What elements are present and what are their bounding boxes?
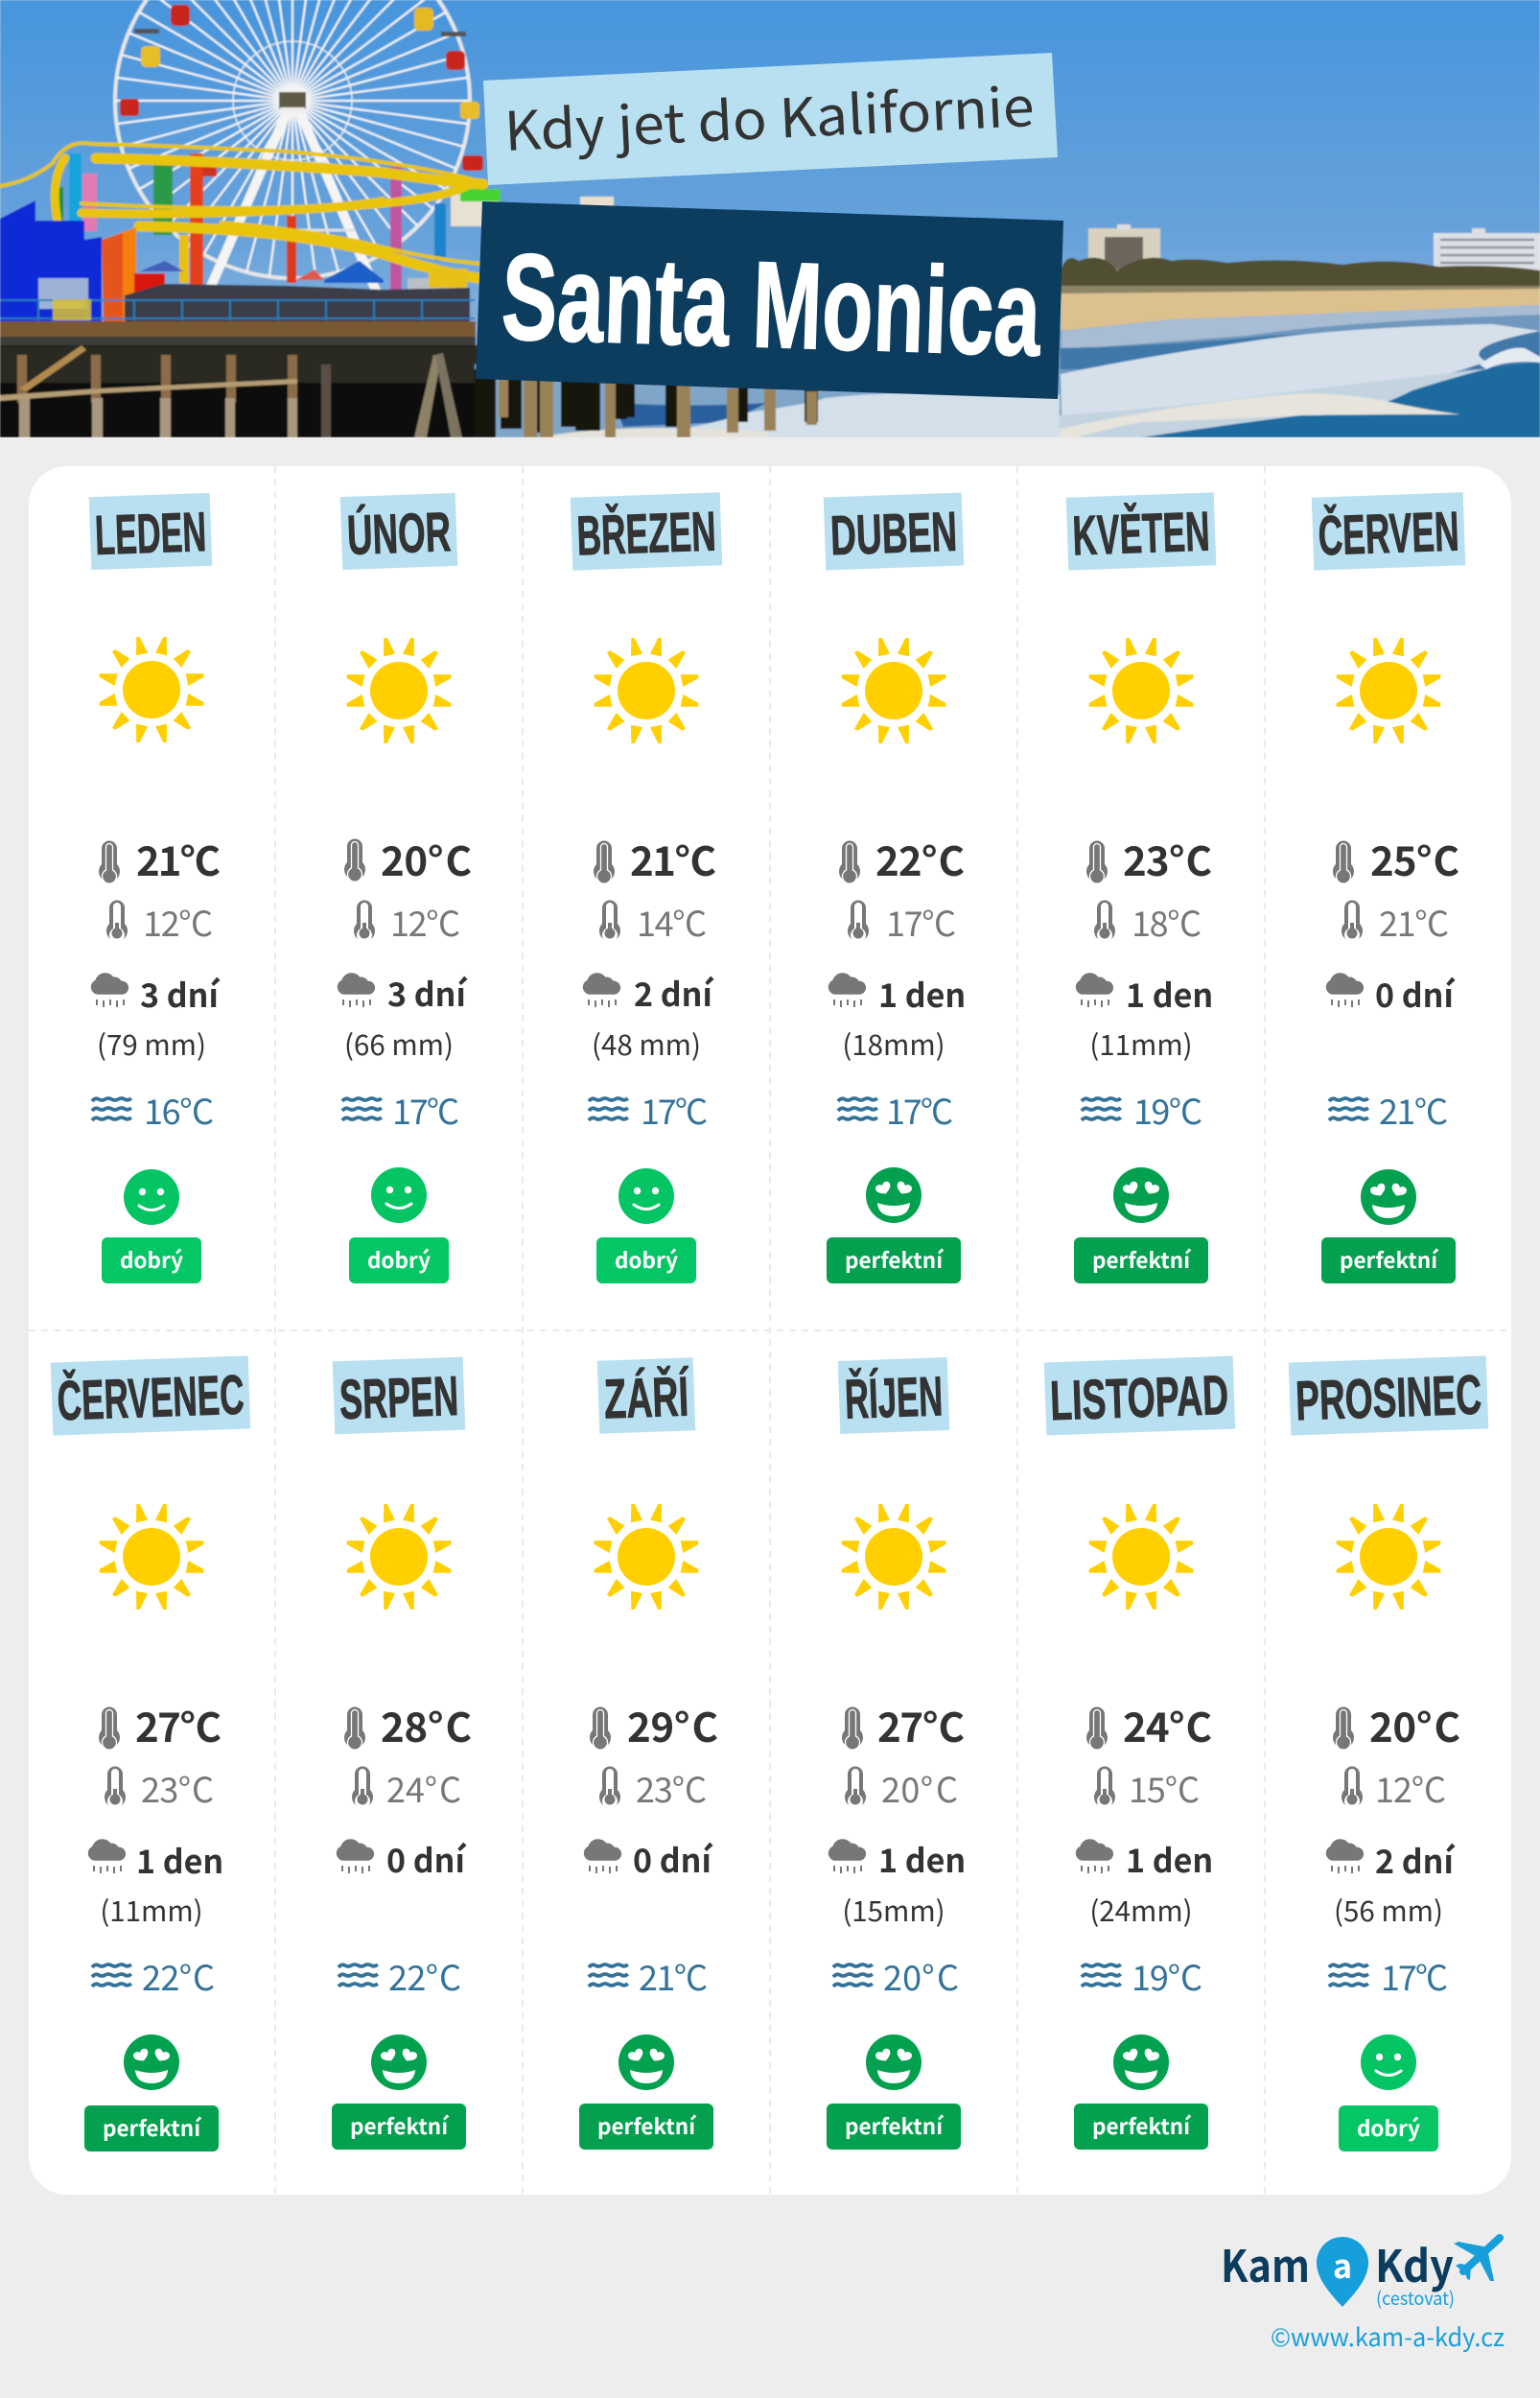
high temperature: 28° C <box>381 1696 472 1754</box>
high temperature: 27° C <box>135 1696 222 1754</box>
high temperature: 27° C <box>877 1696 965 1754</box>
sea temperature <box>1329 1951 1448 2001</box>
rainfall: (11mm) <box>1089 1023 1193 1064</box>
month: Prosinec <box>1289 1355 1488 2151</box>
low temperature <box>599 897 707 947</box>
title ribbon: Santa Monica: Santa Monica <box>500 228 1043 383</box>
icon: sun <box>595 638 698 743</box>
rainy days: 1 den <box>878 970 966 1017</box>
rating: good <box>102 1169 201 1283</box>
rating: good <box>349 1167 449 1283</box>
panel: climate table <box>29 466 1511 2195</box>
rating: good: dobrý <box>367 1244 431 1275</box>
pier pilings <box>475 369 818 437</box>
logo: Kam a Kdy <box>1221 2232 1500 2311</box>
sea temperature <box>838 1085 953 1135</box>
low temperature: 23° C <box>141 1763 214 1813</box>
logo: Kam a Kdy: Kdy <box>1375 2232 1454 2295</box>
rating: perfect: perfektní <box>1340 1244 1438 1275</box>
high temperature: 21° C <box>136 830 221 888</box>
low temperature: 14° C <box>637 897 707 947</box>
rating: perfect: perfektní <box>845 2110 944 2141</box>
sea behind pilings <box>475 364 1074 437</box>
low temperature <box>352 1763 461 1813</box>
month: Listopad <box>1044 1356 1235 2150</box>
rainfall: (48 mm) <box>592 1023 701 1064</box>
sea temperature <box>1082 1085 1202 1135</box>
rainy days <box>1077 1835 1213 1882</box>
high temperature <box>99 830 221 888</box>
rainy days: 3 dní <box>387 969 468 1016</box>
sea temperature <box>1329 1085 1448 1135</box>
heading: Březen: BŘEZEN <box>575 500 717 568</box>
sea temperature: 16° C <box>144 1085 214 1135</box>
rating: good: dobrý <box>120 1244 183 1275</box>
low temperature <box>599 1763 707 1813</box>
rating: perfect <box>827 1167 961 1283</box>
heading: Duben <box>824 493 964 570</box>
crowd <box>125 284 470 322</box>
heading: Únor: ÚNOR <box>346 501 452 567</box>
subtitle ribbon: Kdy jet do Kalifornie <box>483 53 1058 185</box>
low temperature <box>105 1763 214 1813</box>
heading: Září: ZÁŘÍ <box>603 1365 690 1431</box>
rating: good: dobrý <box>615 1244 678 1275</box>
rainfall: (79 mm) <box>97 1023 206 1064</box>
icon: sun <box>100 637 203 742</box>
low temperature: 12° C <box>143 897 213 947</box>
beach towers <box>1087 223 1540 271</box>
low temperature: 12° C <box>1375 1763 1446 1813</box>
rainfall: (18mm) <box>842 1023 945 1064</box>
rainy days: 1 den <box>136 1836 223 1883</box>
header photo: Santa Monica pier and beach <box>0 0 1540 437</box>
sea temperature <box>338 1951 461 2001</box>
sea temperature: 19° C <box>1132 1951 1202 2001</box>
rainy days <box>1327 1836 1456 1883</box>
sea temperature <box>92 1085 214 1135</box>
low temperature: 18° C <box>1132 897 1202 947</box>
heading: Leden <box>89 493 212 570</box>
high temperature: 25° C <box>1370 830 1459 888</box>
icon: map pin <box>1317 2237 1368 2307</box>
pier substructure <box>0 345 479 437</box>
palms <box>1061 257 1540 287</box>
sea temperature: 21° C <box>1379 1085 1448 1135</box>
icon: sun <box>595 1504 698 1610</box>
low temperature <box>106 897 213 947</box>
month: Červenec <box>51 1355 250 2151</box>
rainy days: 0 dní <box>633 1835 713 1882</box>
heading: Květen <box>1066 492 1216 571</box>
rainy days <box>338 969 468 1016</box>
month: Srpen <box>332 1357 472 2150</box>
heading: Květen: KVĚTEN <box>1071 501 1211 567</box>
roller coaster tracks <box>0 143 484 278</box>
low temperature: 12° C <box>390 897 460 947</box>
rainy days <box>1077 970 1213 1017</box>
rating: perfect <box>332 2034 466 2150</box>
rating: perfect <box>1074 2034 1208 2150</box>
heading: Únor <box>340 493 457 570</box>
rainy days: 1 den <box>1126 970 1213 1017</box>
low temperature <box>1342 897 1449 947</box>
pier deck <box>0 321 476 337</box>
icon: sun <box>1337 638 1440 743</box>
sea temperature <box>92 1951 215 2001</box>
heading: Červen <box>1312 492 1465 571</box>
icon: sun <box>842 638 945 743</box>
heading: Srpen <box>333 1357 465 1434</box>
month: Říjen <box>827 1357 966 2150</box>
rating: perfect: perfektní <box>1092 1244 1191 1275</box>
sea temperature: 20° C <box>883 1951 959 2001</box>
rainy days: 2 dní <box>1375 1836 1456 1883</box>
heading: Březen <box>571 492 722 571</box>
low temperature <box>1094 897 1202 947</box>
rating: perfect: perfektní <box>845 1244 944 1275</box>
rating: good: dobrý <box>1357 2112 1420 2143</box>
sea temperature <box>833 1951 959 2001</box>
rainy days: 2 dní <box>634 969 714 1016</box>
heading: Říjen: ŘÍJEN <box>844 1365 944 1431</box>
rating: good <box>596 1168 696 1283</box>
rainfall: (66 mm) <box>344 1023 454 1064</box>
low temperature: 23° C <box>636 1763 707 1813</box>
water <box>1059 315 1540 416</box>
high temperature: 22° C <box>875 830 965 888</box>
rating: perfect: perfektní <box>103 2112 201 2143</box>
rainy days <box>89 1836 223 1883</box>
heading: Červenec <box>51 1355 250 1436</box>
pillars <box>69 153 82 225</box>
low temperature: 20° C <box>881 1763 958 1813</box>
heading: Listopad: LISTOPAD <box>1049 1364 1229 1432</box>
low temperature: 24° C <box>386 1763 461 1813</box>
logo: Kam a Kdy: Kam <box>1221 2232 1310 2295</box>
rating: perfect <box>827 2034 961 2150</box>
rainy days: 3 dní <box>140 970 221 1017</box>
month: Červen <box>1312 492 1465 1283</box>
high temperature: 29° C <box>627 1696 718 1754</box>
rainy days <box>1327 970 1456 1017</box>
heading: Červenec: ČERVENEC <box>57 1364 245 1432</box>
rainy days <box>829 1835 966 1882</box>
icon: airplane <box>1454 2238 1500 2281</box>
rainy days <box>585 1835 713 1882</box>
rating: perfect: perfektní <box>1092 2110 1191 2141</box>
heading: Srpen: SRPEN <box>338 1365 459 1431</box>
month: Květen <box>1066 492 1216 1283</box>
low temperature <box>354 897 460 947</box>
rainfall: (15mm) <box>842 1890 945 1930</box>
rainy days <box>584 969 714 1016</box>
sea temperature <box>589 1085 708 1135</box>
month: Únor <box>338 493 472 1283</box>
rating: perfect <box>1321 1169 1456 1283</box>
website link: ©www.kam-a-kdy.cz <box>1271 2318 1505 2354</box>
subtitle ribbon: Kdy jet do Kalifornie: Kdy jet do Kalifornie <box>502 64 1036 167</box>
rainy days <box>829 970 966 1017</box>
month: Duben <box>824 493 966 1283</box>
logo: Kam a Kdy: (cestovat) <box>1376 2285 1455 2311</box>
low temperature: 17° C <box>886 897 956 947</box>
high temperature: 21° C <box>630 830 716 888</box>
month: Září <box>579 1357 718 2150</box>
low temperature: 15° C <box>1129 1763 1200 1813</box>
high temperature: 23° C <box>1123 830 1212 888</box>
rainfall: (56 mm) <box>1334 1890 1443 1930</box>
heading: Říjen <box>838 1357 949 1434</box>
sea temperature: 17° C <box>392 1085 459 1135</box>
sand <box>1060 289 1540 331</box>
high temperature: 20° C <box>381 830 472 888</box>
low temperature <box>848 897 956 947</box>
rainy days: 1 den <box>1126 1835 1213 1882</box>
sea temperature: 19° C <box>1133 1085 1202 1135</box>
heading: Listopad <box>1044 1356 1235 1435</box>
high temperature: 24° C <box>1123 1696 1212 1754</box>
sea temperature: 17° C <box>641 1085 708 1135</box>
title ribbon: Santa Monica <box>476 201 1063 399</box>
rainy days <box>92 970 221 1017</box>
icon: sun <box>347 638 451 743</box>
sea temperature: 21° C <box>639 1951 708 2001</box>
umbrellas and stalls <box>139 261 184 271</box>
rainfall: (11mm) <box>100 1890 203 1930</box>
icon: sun <box>1089 1504 1193 1610</box>
sea temperature: 17° C <box>886 1085 953 1135</box>
sea temperature: 17° C <box>1381 1951 1448 2001</box>
sea temperature: 22° C <box>142 1951 215 2001</box>
icon: sun <box>100 1504 203 1610</box>
low temperature <box>1342 1763 1446 1813</box>
rainy days: 1 den <box>878 1835 966 1882</box>
icon: sun <box>1089 638 1193 743</box>
blue building <box>0 200 136 326</box>
rainy days: 0 dní <box>386 1835 467 1882</box>
icon: map pin: a <box>1333 2241 1352 2288</box>
ferris wheel <box>115 0 483 297</box>
icon: sun <box>1337 1504 1440 1610</box>
sea temperature <box>342 1085 459 1135</box>
low temperature <box>1094 1763 1200 1813</box>
rating: perfect <box>1074 1167 1208 1283</box>
icon: sun <box>842 1504 945 1610</box>
heading: Duben: DUBEN <box>829 501 958 567</box>
icon: sun <box>347 1504 451 1610</box>
heading: Září <box>597 1357 695 1434</box>
rainy days <box>338 1835 467 1882</box>
rating: perfect <box>579 2034 713 2150</box>
sea temperature <box>1082 1951 1202 2001</box>
rating: perfect: perfektní <box>350 2110 449 2141</box>
month: Březen <box>571 492 722 1283</box>
sea temperature: 22° C <box>388 1951 461 2001</box>
rating: perfect <box>84 2034 219 2151</box>
month: Leden <box>89 493 221 1283</box>
sea temperature <box>589 1951 708 2001</box>
low temperature <box>845 1763 958 1813</box>
rainfall: (24mm) <box>1089 1890 1193 1930</box>
high temperature: 20° C <box>1369 1696 1460 1754</box>
heading: Leden: LEDEN <box>94 501 207 567</box>
rating: perfect: perfektní <box>597 2110 696 2141</box>
low temperature: 21° C <box>1379 897 1449 947</box>
rating: good <box>1339 2034 1438 2151</box>
rainy days: 0 dní <box>1375 970 1456 1017</box>
